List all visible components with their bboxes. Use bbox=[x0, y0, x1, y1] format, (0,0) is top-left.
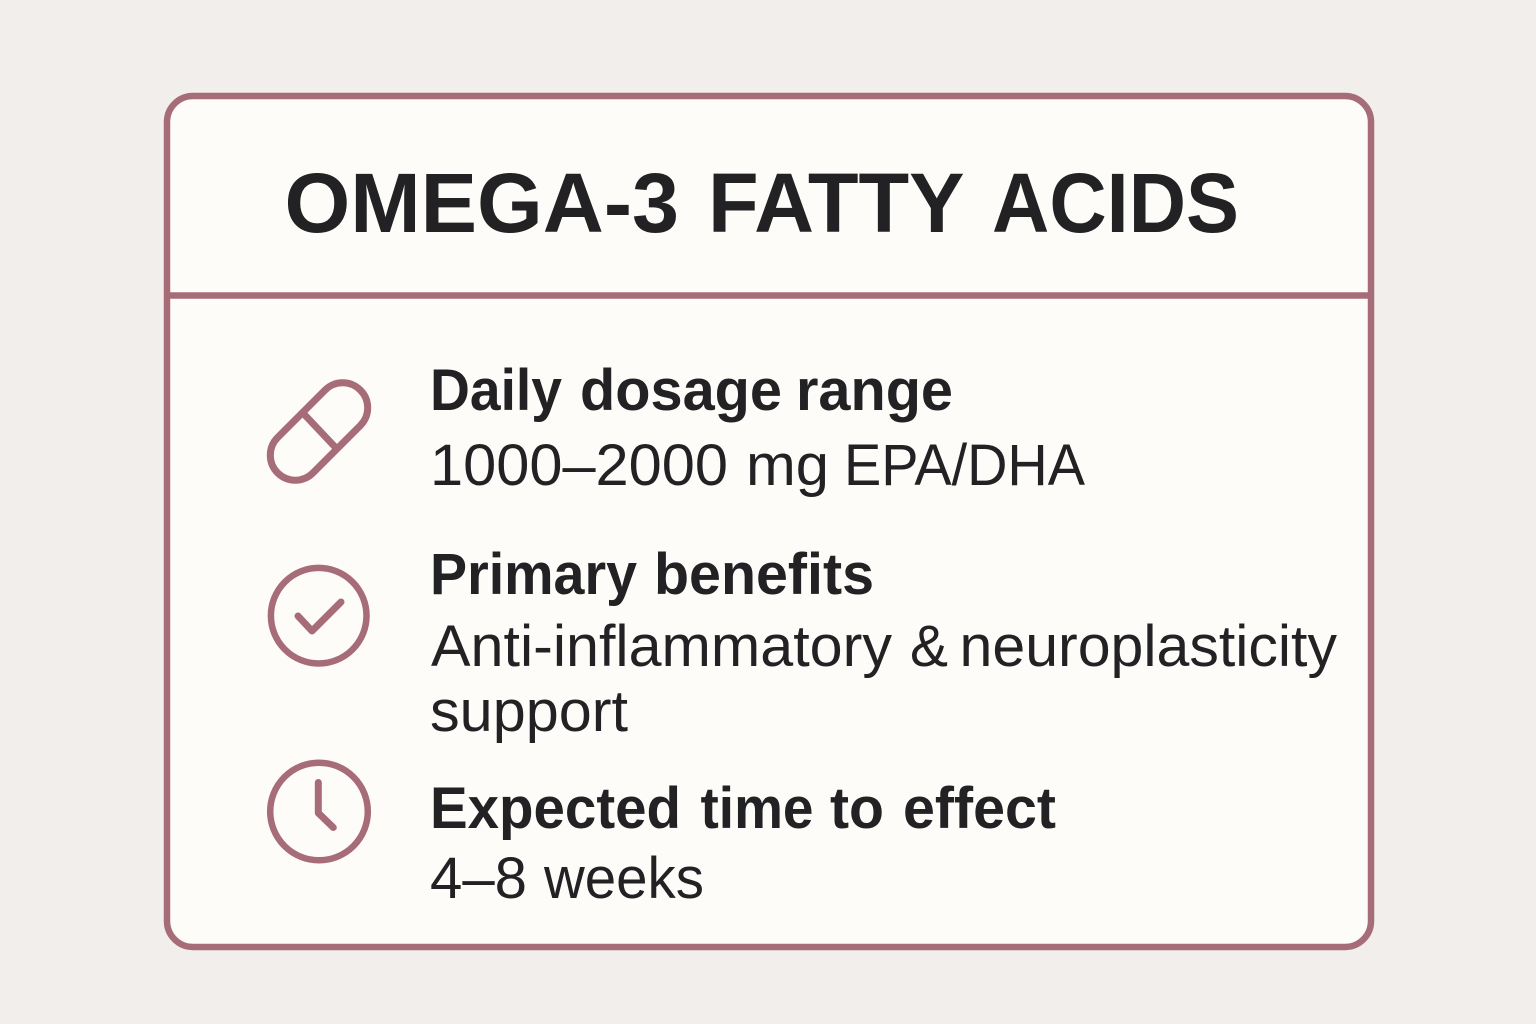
text: benefits value: neuroplasticity bbox=[960, 614, 1337, 679]
text: time value: 4–8 bbox=[430, 846, 527, 911]
text: time value: weeks bbox=[543, 846, 704, 911]
title: FATTY bbox=[708, 156, 963, 250]
heading: expected time to effect: to bbox=[830, 776, 884, 841]
title: OMEGA-3 bbox=[284, 156, 679, 250]
heading: expected time to effect: effect bbox=[903, 776, 1056, 841]
panel: omega-3 card bbox=[167, 96, 1371, 947]
icon: check circle bbox=[271, 568, 367, 664]
heading: daily dosage range: dosage bbox=[580, 358, 782, 423]
heading: daily dosage range: range bbox=[796, 358, 953, 423]
text: benefits value: Anti-inflammatory bbox=[431, 614, 892, 679]
text: dosage value: 1000–2000 bbox=[430, 433, 728, 498]
icon: capsule bbox=[260, 372, 378, 491]
heading: daily dosage range: Daily bbox=[430, 358, 562, 423]
text: benefits value second line: support bbox=[430, 679, 628, 744]
icon: clock bbox=[270, 763, 368, 860]
heading: expected time to effect: time bbox=[700, 776, 814, 841]
title: ACIDS bbox=[992, 156, 1239, 250]
heading: expected time to effect: Expected bbox=[430, 776, 681, 841]
text: benefits value: & bbox=[910, 614, 948, 679]
heading: primary benefits: benefits bbox=[654, 542, 874, 607]
text: dosage value: EPA/DHA bbox=[844, 433, 1085, 498]
heading: primary benefits: Primary bbox=[430, 542, 637, 607]
text: dosage value: mg bbox=[746, 433, 829, 498]
